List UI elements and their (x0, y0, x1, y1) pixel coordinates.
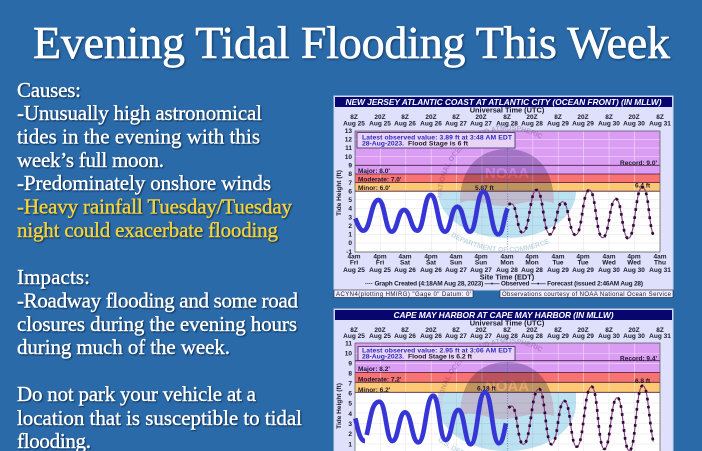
y axis title: Tide Height (ft) (336, 383, 343, 429)
top time axis: 20Z (425, 114, 437, 121)
top time axis: 20Z (475, 114, 487, 121)
text block: parking advice (17, 382, 302, 451)
latest observation callout: 28-Aug-2023. (362, 140, 404, 148)
bottom time axis: 4am (449, 254, 463, 260)
y axis labels: 5 (348, 197, 352, 204)
record and stage lines (355, 361, 660, 392)
y axis labels: 13 (345, 128, 352, 135)
bottom time axis: Fri (350, 260, 358, 266)
top time axis: Aug 27 (445, 333, 467, 340)
top time axis: Aug 31 (649, 120, 671, 128)
stage labels: Record: 9.0' (620, 160, 657, 167)
y axis labels: 4 (348, 411, 352, 418)
top time axis: Aug 30 (623, 333, 645, 340)
top time axis: Aug 27 (470, 120, 492, 128)
latest observation callout: 28-Aug-2023. (362, 354, 404, 360)
observed tide line (355, 392, 506, 444)
top time axis: 8Z (605, 327, 613, 334)
bottom time axis: Aug 26 (420, 267, 442, 274)
bottom time axis: Aug 25 (343, 267, 365, 274)
latest observation callout (358, 346, 515, 360)
top time axis: 8Z (401, 327, 409, 334)
text block: impacts: Impacts: (17, 265, 90, 289)
NOAA watermark: NATIONAL OCEANIC AND ATMOSPHERIC (437, 125, 542, 198)
y axis labels: 8 (348, 171, 352, 178)
top time axis: Aug 28 (521, 120, 543, 128)
stage labels: Moderate: 7.2' (358, 376, 402, 384)
y axis title: Tide Height (ft) (336, 170, 343, 216)
top time axis: 8Z (605, 114, 613, 121)
top time axis: 20Z (475, 327, 487, 334)
bottom time axis (343, 254, 671, 282)
top time axis: Aug 29 (547, 333, 569, 340)
top time axis: 8Z (503, 327, 511, 334)
latest observation callout: Flood Stage is 6 ft (408, 140, 469, 148)
flood stage bands (355, 343, 660, 392)
y axis labels: 8 (348, 370, 352, 378)
top time axis: Aug 27 (445, 120, 467, 128)
stage labels: 6.8 ft (635, 378, 651, 385)
bottom time axis: Sat (400, 260, 411, 266)
stage labels (358, 160, 657, 192)
bottom time axis: Aug 29 (547, 267, 569, 274)
top time axis: Aug 29 (572, 333, 594, 340)
top time axis: Aug 25 (369, 333, 391, 340)
top time axis: Aug 25 (343, 120, 365, 128)
bottom time axis: Site Time (EDT) (480, 272, 535, 282)
bottom time axis: Thu (654, 260, 666, 266)
y axis labels: 6 (348, 390, 352, 398)
y axis labels: 1 (348, 232, 352, 238)
bottom time axis: Aug 25 (369, 267, 391, 274)
text block: parking advice: location that is susceptible to tidal (17, 406, 302, 430)
bottom time axis: 4am (653, 254, 667, 260)
bottom time axis: Wed (627, 260, 641, 266)
top time axis: Aug 26 (394, 333, 416, 340)
stage labels: Minor: 6.0' (358, 185, 391, 192)
top time axis: 8Z (656, 114, 664, 121)
top time axis: Aug 27 (470, 333, 492, 340)
bottom time axis: Sat (426, 260, 437, 266)
top time axis: Aug 28 (496, 333, 518, 340)
y axis labels: 11 (345, 340, 352, 348)
bottom time axis: Sun (450, 260, 462, 266)
text block: causes: -Unusually high astronomical (17, 101, 262, 125)
plot area (355, 131, 660, 252)
top time axis: Universal Time (UTC) (470, 106, 545, 114)
y axis labels: 2 (348, 431, 352, 438)
top time axis: Aug 29 (572, 120, 594, 128)
top time axis: 20Z (374, 114, 386, 121)
y axis labels: 7 (348, 380, 352, 388)
plot frame and y axis (355, 131, 660, 252)
footer boxes (334, 290, 673, 298)
text block: causes: tides in the evening with this (17, 124, 260, 148)
bottom time axis: Mon (500, 260, 514, 266)
text block: causes: week’s full moon. (17, 148, 164, 172)
stage labels: Major: 8.2' (358, 366, 390, 373)
top time axis: 20Z (526, 327, 538, 334)
observed tide line (355, 192, 508, 234)
top time axis: Aug 30 (598, 333, 620, 340)
flood stage bands (355, 131, 660, 191)
y axis labels: 9 (348, 162, 352, 170)
bottom time axis: Sun (475, 260, 487, 266)
text block: causes: -Heavy rainfall Tuesday/Tuesday (17, 194, 292, 218)
chart: Atlantic City tide gauge (334, 96, 674, 298)
plot frame (355, 343, 660, 451)
footer boxes: Observations courtesy of NOAA National Ocean Service (502, 292, 672, 298)
top time axis: 20Z (628, 114, 640, 121)
top time axis: Aug 26 (420, 120, 442, 128)
chart title bar: CAPE MAY HARBOR AT CAPE MAY HARBOR (IN MLLW) (394, 310, 614, 320)
top time axis: Universal Time (UTC) (470, 318, 545, 328)
text block: impacts: -Roadway flooding and some road (17, 288, 298, 312)
top time axis: Aug 30 (598, 120, 620, 128)
bottom time axis: 4am (347, 254, 361, 260)
top time axis: Aug 26 (394, 120, 416, 128)
top time axis: 20Z (577, 114, 589, 121)
text block: causes: -Predominately onshore winds (17, 171, 271, 195)
bottom time axis: 4pm (373, 254, 387, 260)
y axis labels: 10 (345, 350, 352, 358)
top time axis: 8Z (350, 327, 358, 334)
NOAA watermark: NOAA (485, 378, 529, 395)
bottom time axis: 4am (398, 254, 412, 260)
y axis labels: 1 (348, 442, 352, 448)
footer boxes: ACYN4(plotting HMIRG) "Gage 0" Datum: 0' (336, 292, 471, 298)
y axis labels: 3 (348, 421, 352, 428)
stage labels: 6.18 ft (477, 386, 497, 392)
top time axis: 20Z (374, 327, 386, 334)
top time axis (343, 318, 671, 340)
stage labels: 5.87 ft (475, 185, 495, 192)
NOAA watermark (438, 338, 576, 451)
bottom time axis: 4pm (576, 254, 590, 260)
bottom time axis: Fri (376, 260, 384, 266)
y axis labels: 7 (348, 180, 352, 187)
stage labels: Record: 9.4' (620, 356, 657, 362)
y axis labels: 2 (348, 223, 352, 230)
top time axis: 8Z (554, 114, 562, 121)
bottom time axis: Wed (602, 260, 616, 266)
stage labels: 6.4 ft (635, 182, 651, 190)
top time axis: 8Z (503, 114, 511, 121)
bottom time axis: 4pm (424, 254, 438, 260)
top time axis: 8Z (452, 327, 460, 334)
bottom time axis: 4pm (474, 254, 488, 260)
text block: impacts (17, 265, 298, 359)
latest observation callout: Latest observed value: 2.95 ft at 3:06 AM EDT (362, 348, 513, 354)
top time axis: 20Z (526, 114, 538, 121)
top time axis: Aug 31 (649, 333, 671, 340)
bottom time axis: Aug 28 (521, 267, 543, 274)
bottom time axis: Aug 31 (649, 267, 671, 274)
top time axis: 8Z (401, 114, 409, 121)
chart title bar: NEW JERSEY ATLANTIC COAST AT ATLANTIC CITY (OCEAN FRONT) (IN MLLW) (346, 97, 662, 107)
top time axis: Aug 29 (547, 120, 569, 128)
bottom time axis: 4pm (627, 254, 641, 260)
forecast tide line (508, 187, 653, 238)
text block: causes: night could exacerbate flooding (17, 218, 278, 242)
top time axis (343, 106, 671, 128)
bottom time axis: Aug 27 (470, 267, 492, 274)
top time axis: 8Z (656, 327, 664, 334)
y axis labels: 11 (345, 145, 352, 152)
y axis labels: 3 (348, 214, 352, 221)
top time axis: Aug 25 (369, 120, 391, 128)
top time axis: 8Z (350, 114, 358, 121)
bottom time axis: Mon (525, 260, 539, 266)
top time axis: Aug 26 (420, 333, 442, 340)
y axis labels (345, 128, 352, 256)
y axis labels: 12 (345, 136, 352, 144)
y axis labels: 9 (348, 360, 352, 368)
bottom time axis: Tue (577, 260, 589, 266)
bottom time axis: 4am (602, 254, 616, 260)
NOAA watermark: U.S. DEPARTMENT OF COMMERCE (438, 226, 550, 252)
text block: impacts: closures during the evening hours (17, 312, 297, 336)
bottom time axis: Aug 30 (623, 267, 645, 274)
bottom time axis: Tue (552, 260, 564, 266)
top time axis: 8Z (452, 114, 460, 121)
NOAA watermark (437, 125, 576, 252)
record and stage lines (355, 165, 660, 191)
top time axis: 20Z (425, 327, 437, 334)
stage labels: Major: 8.0' (358, 168, 390, 175)
top time axis: 8Z (554, 327, 562, 334)
plot area (355, 343, 660, 451)
NOAA watermark: NOAA (485, 165, 529, 182)
bottom time axis: 4am (500, 254, 514, 260)
y axis labels (345, 340, 352, 448)
chart title bar (335, 310, 672, 320)
text block: causes (17, 78, 292, 242)
stage labels: Moderate: 7.0' (358, 176, 402, 184)
text block: parking advice: Do not park your vehicle at a (17, 382, 257, 406)
y axis labels: 4 (348, 206, 352, 213)
text block: causes: Causes: (17, 78, 81, 102)
top time axis: Aug 25 (343, 333, 365, 340)
bottom time axis: Aug 27 (445, 267, 467, 274)
text block: impacts: during much of the week. (17, 335, 230, 359)
latest observation callout: Flood Stage is 6.2 ft (408, 354, 473, 360)
bottom time axis: 4am (551, 254, 565, 260)
y axis labels: -1 (346, 249, 352, 256)
title: Evening Tidal Flooding This Week (33, 17, 670, 68)
y axis labels: 10 (345, 154, 352, 161)
latest observation callout (357, 132, 515, 148)
stage labels: Minor: 6.2' (358, 387, 391, 394)
chart legend: ···· Graph Created (4:18AM Aug 28, 2023) —•— Observed —•— Forecast (issued 2:46AM Aug 28) (365, 280, 643, 288)
top time axis: 20Z (628, 327, 640, 334)
y axis labels: 0 (348, 240, 352, 247)
bottom time axis: 4pm (525, 254, 539, 260)
NOAA watermark: NATIONAL OCEANIC AND ATMOSPHERIC (438, 338, 542, 410)
forecast tide line (508, 386, 653, 451)
bottom time axis: Aug 28 (496, 267, 518, 274)
bottom time axis: Aug 29 (572, 267, 594, 274)
latest observation callout: Latest observed value: 3.89 ft at 3:48 AM EDT (362, 134, 513, 142)
y axis labels: 5 (348, 400, 352, 408)
top time axis: Aug 30 (623, 120, 645, 128)
top time axis: 20Z (577, 327, 589, 334)
y axis labels: 6 (348, 188, 352, 196)
top time axis: Aug 28 (521, 333, 543, 340)
bottom time axis: Aug 26 (394, 267, 416, 274)
bottom time axis: Aug 30 (598, 267, 620, 274)
top time axis: Aug 28 (496, 120, 518, 128)
stage labels (358, 356, 657, 394)
chart: Cape May Harbor tide gauge (334, 308, 674, 451)
